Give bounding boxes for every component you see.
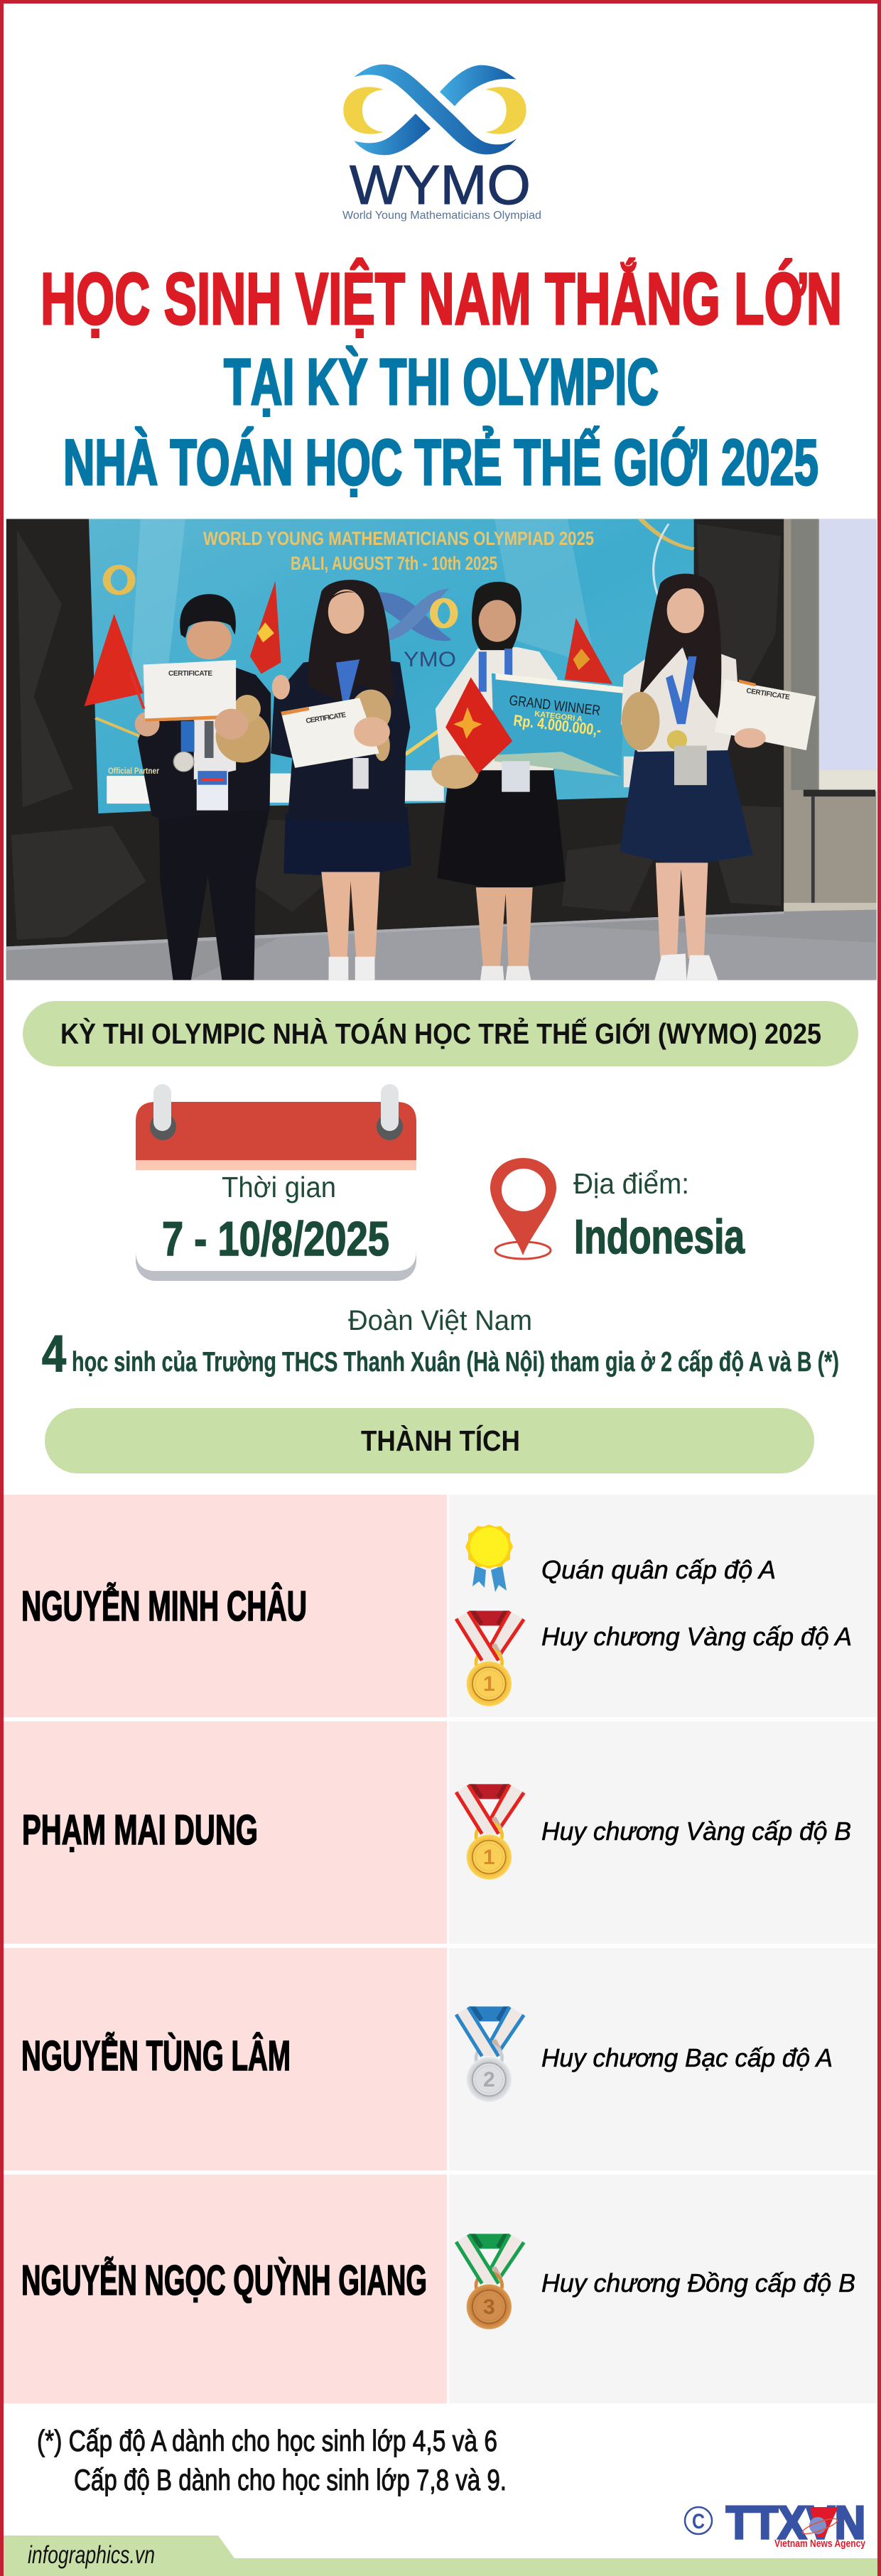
award 1: Quán quân cấp độ A [541,1555,776,1584]
pill heading: achievements: THÀNH TÍCH [361,1424,520,1457]
icon: infinity symbol [343,65,526,155]
location block [490,1158,745,1264]
agency wordmark: TTXVN [726,2496,865,2548]
banner heading 2: BALI, AUGUST 7th - 10th 2025 [291,553,497,574]
calendar shadow [136,1208,416,1281]
banner heading 1: WORLD YOUNG MATHEMATICIANS OLYMPIAD 2025 [203,528,594,549]
calendar header [136,1102,416,1160]
logo subtitle: World Young Mathematicians Olympiad [342,210,541,222]
logo: WYMO [342,65,541,222]
calendar rings [150,1084,403,1140]
copyright symbol: C [692,2510,705,2533]
prize board text [508,693,602,739]
location value: Indonesia [574,1210,745,1264]
table: achievements [4,1495,877,2403]
name: NGUYỄN NGỌC QUỲNH GIANG [21,2256,427,2304]
student 2: girl [283,807,411,877]
wall and screen [784,519,881,910]
name: NGUYỄN MINH CHÂU [21,1582,307,1630]
banner logo [378,592,451,641]
icon: rosette [465,1525,513,1592]
icon: silver medal [455,2006,524,2102]
calendar band [136,1160,416,1170]
grand winner: GRAND WINNER [508,693,601,719]
calendar body [136,1165,416,1271]
row 1: Nguyễn Minh Châu [4,1495,877,1717]
footnote line 2: Cấp độ B dành cho học sinh lớp 7,8 và 9. [74,2463,507,2496]
title [40,258,842,499]
floor [6,909,881,980]
name: NGUYỄN TÙNG LÂM [21,2032,291,2079]
icon: bronze medal [455,2234,524,2329]
row 4: Nguyễn Ngọc Quỳnh Giang [4,2175,877,2403]
copyright symbol [685,2507,712,2534]
logo wordmark: WYMO [350,153,531,216]
title line 2: TẠI KỲ THI OLYMPIC [224,345,659,418]
pill heading: achievements [45,1408,814,1473]
certificate 1: CERTIFICATE [168,670,212,678]
student 3: girl with grand winner board [437,767,566,891]
number 4: 4 [42,1326,66,1382]
prize: Rp. 4.000.000,- [512,711,602,739]
award: Huy chương Vàng cấp độ B [541,1817,851,1846]
time label: Thời gian [222,1171,336,1203]
icon: map pin [490,1158,556,1259]
flags in the back [250,581,281,674]
footer band [4,2536,877,2576]
pill heading: competition [23,1001,858,1066]
category: KATEGORI A [534,710,583,724]
delegation label: Đoàn Việt Nam [348,1305,532,1336]
globe emblem [801,2507,838,2538]
icon: gold medal: 1 [483,1846,495,1869]
award 2: Huy chương Vàng cấp độ A [541,1622,852,1651]
name: PHẠM MAI DUNG [22,1807,258,1853]
certificate 2: CERTIFICATE [306,711,347,725]
student 4: girl on the right [620,749,753,867]
logo: TTXVN [685,2496,866,2550]
time value: 7 - 10/8/2025 [162,1212,389,1266]
icon: bronze medal: 3 [483,2295,495,2319]
location label: Địa điểm: [573,1167,689,1200]
delegation block [42,1305,839,1382]
official partner label: Official Partner [108,766,159,776]
footnote [37,2424,507,2496]
photo scene [6,519,881,980]
icon: gold medal [455,1784,524,1880]
footnote line 1: (*) Cấp độ A dành cho học sinh lớp 4,5 và 6 [37,2424,497,2457]
banner logo wordmark: YMO [404,648,456,671]
photo: four students on stage [6,519,881,980]
row 3: Nguyễn Tùng Lâm [4,1948,877,2170]
row 2: Phạm Mai Dung [4,1721,877,1944]
certificate 3: CERTIFICATE [746,687,791,702]
icon: gold medal: 1 [483,1672,495,1696]
icon: silver medal: 2 [483,2068,495,2091]
footer site label: infographics.vn [28,2541,155,2569]
calendar card: time [136,1084,416,1281]
award: Huy chương Bạc cấp độ A [541,2043,833,2072]
banner [89,519,694,813]
icon: gold medal [455,1611,524,1706]
student 1: boy [159,807,270,980]
award: Huy chương Đồng cấp độ B [541,2268,855,2298]
